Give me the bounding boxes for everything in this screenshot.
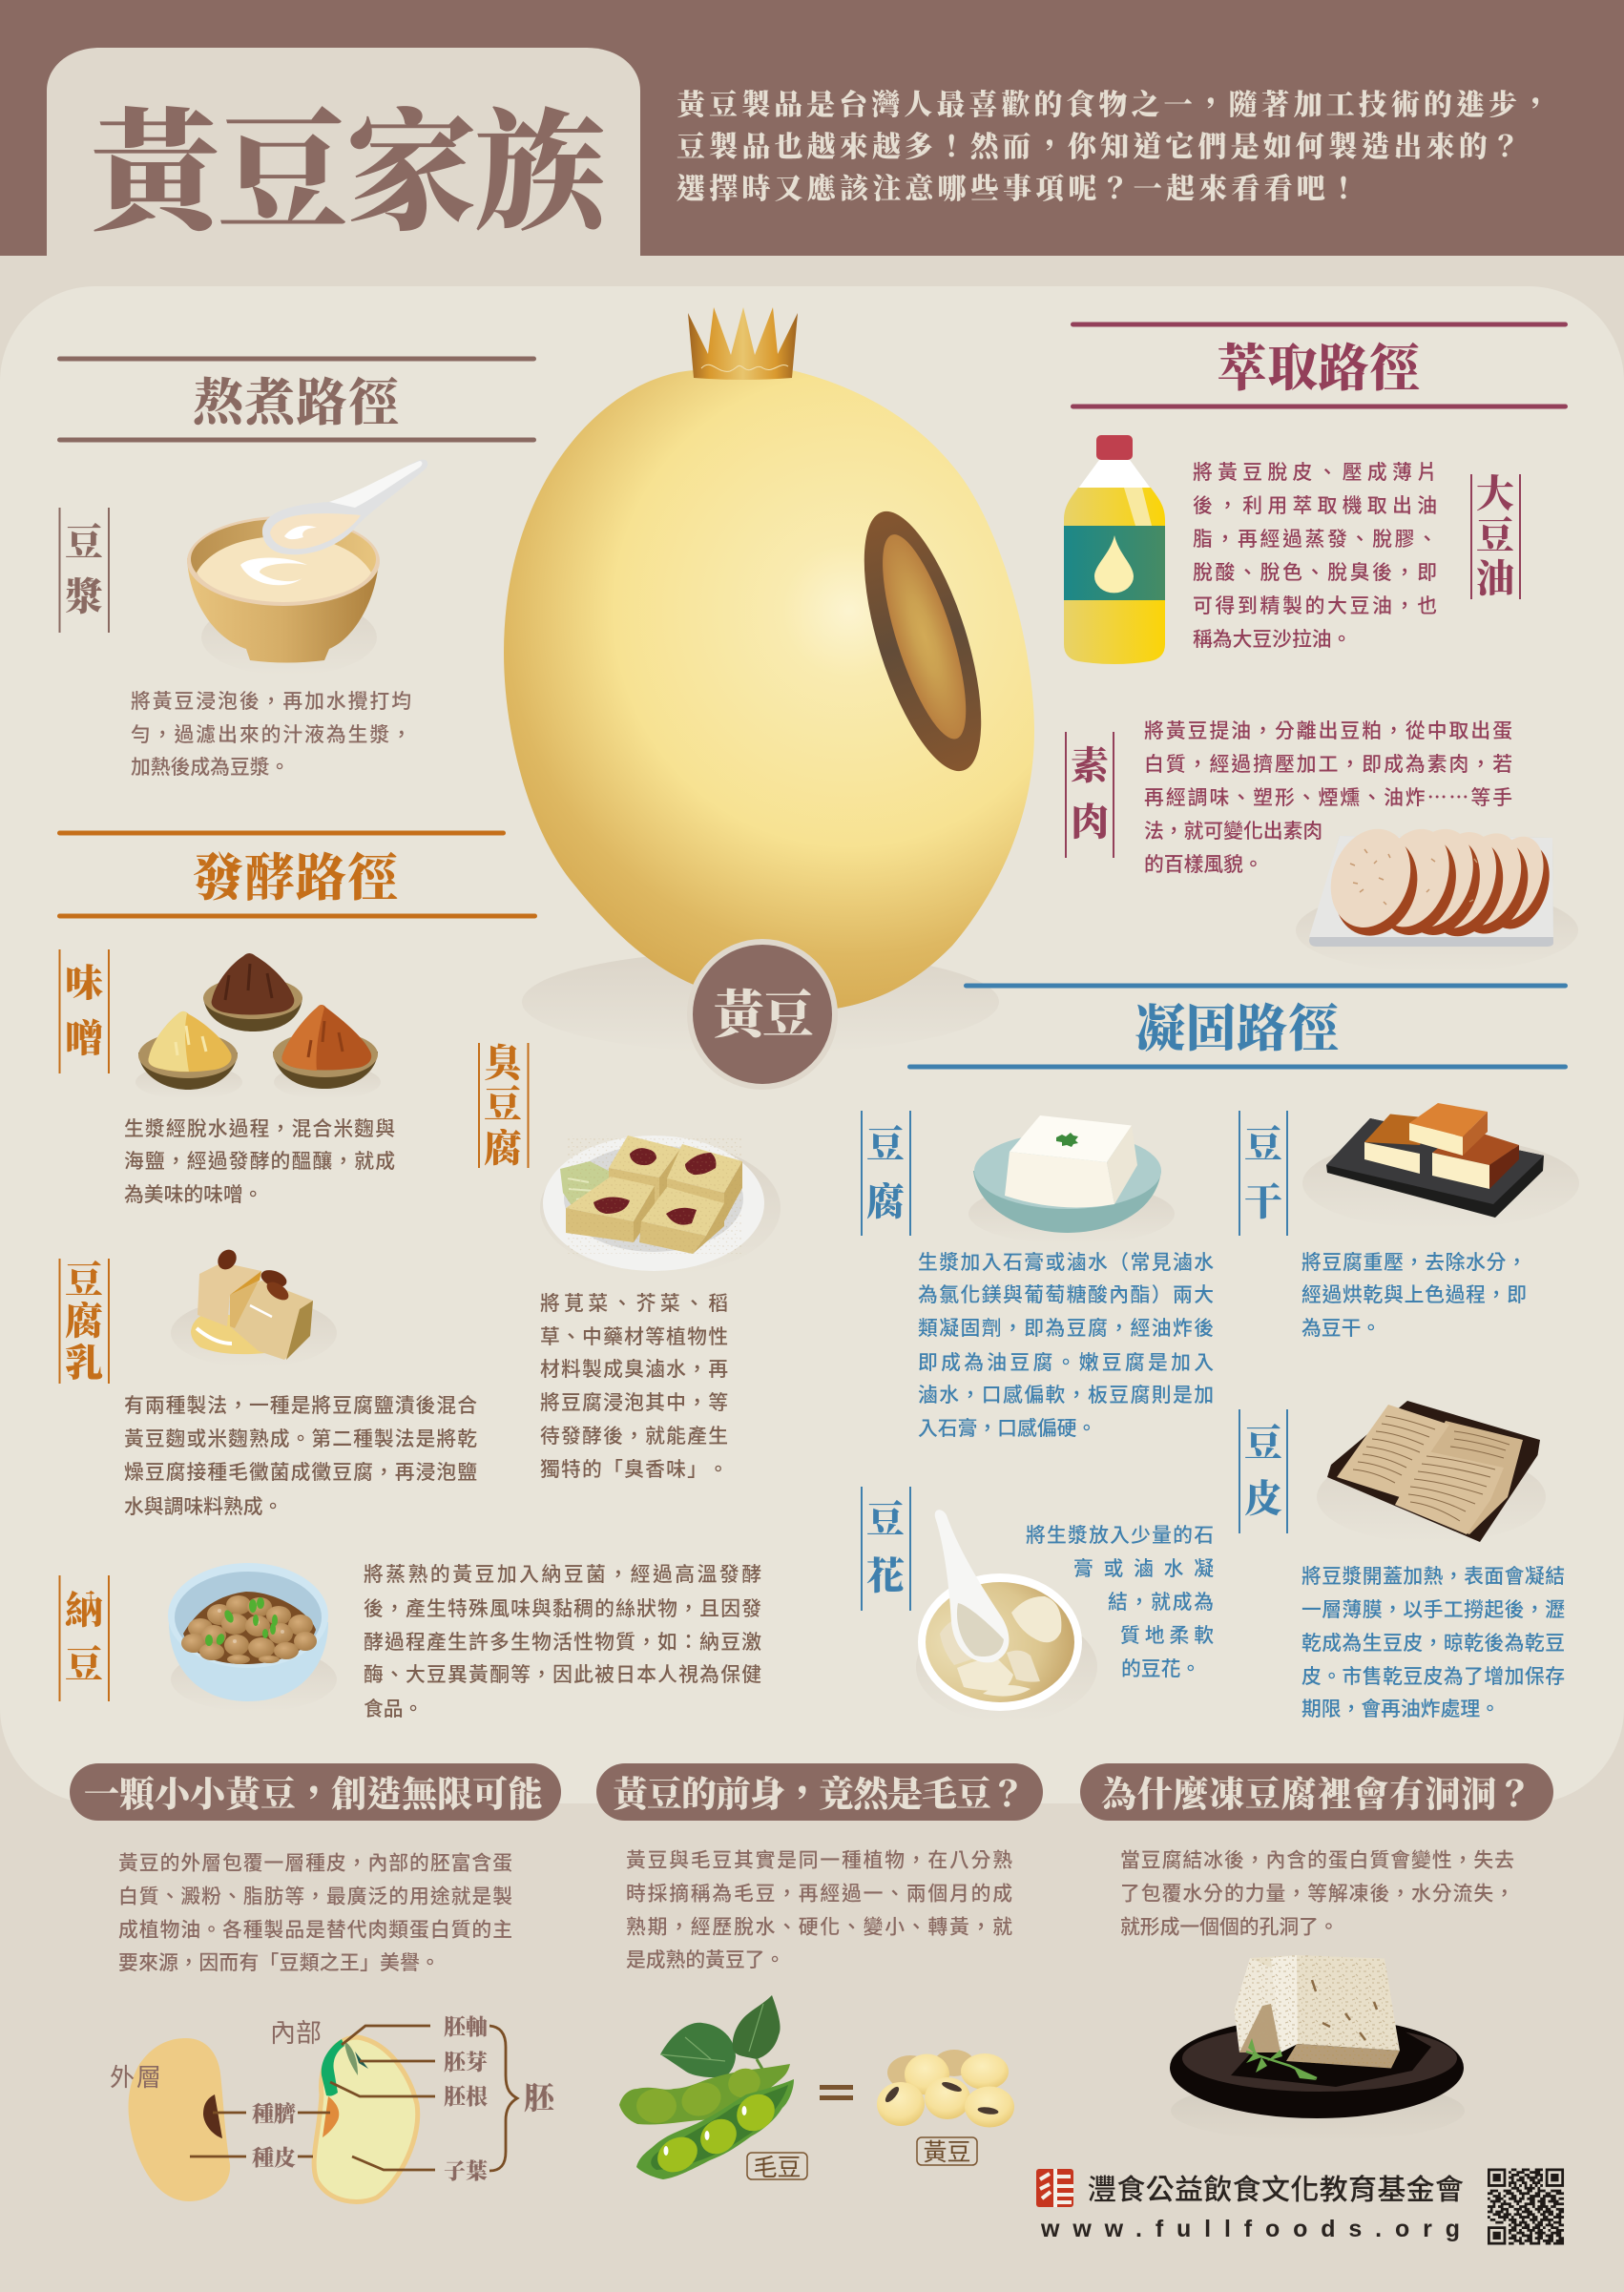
text 豆花: 結，就成為 xyxy=(1108,1592,1214,1614)
footer: foundation logo and name xyxy=(1036,2168,1564,2245)
text 納豆: 食品。 xyxy=(364,1698,423,1720)
text 豆皮: 乾成為生豆皮，晾乾後為乾豆 xyxy=(1301,1633,1565,1655)
label 臭豆腐 xyxy=(479,1042,529,1170)
label 素肉: 素 xyxy=(1071,744,1110,787)
label 納豆 xyxy=(59,1575,109,1701)
central soybean xyxy=(504,307,1034,1087)
text 豆漿: 將黃豆浸泡後，再加水攪打均 xyxy=(131,691,411,713)
tofu back right xyxy=(667,1144,742,1193)
label 豆花 xyxy=(862,1487,910,1611)
text 豆花: 質地柔軟 xyxy=(1120,1625,1214,1647)
label 大豆油 xyxy=(1471,472,1520,600)
bean body xyxy=(504,365,1034,1010)
labels: 外層 xyxy=(110,2063,161,2092)
text 納豆: 將蒸熟的黃豆加入納豆菌，經過高溫發酵 xyxy=(364,1564,761,1586)
label 納豆: 納 xyxy=(65,1589,103,1632)
text 豆花: 的豆花。 xyxy=(1121,1658,1200,1680)
panel: 黃豆的前身 xyxy=(596,1763,1043,2181)
text 豆漿: 加熱後成為豆漿。 xyxy=(131,757,289,779)
text 大豆油 xyxy=(1193,462,1437,651)
text 臭豆腐 xyxy=(540,1293,728,1481)
labels: 內部 xyxy=(270,2019,322,2048)
label 大豆油: 豆 xyxy=(1476,514,1514,557)
label 豆干: 豆 xyxy=(1244,1123,1282,1166)
text 豆腐乳 xyxy=(124,1395,477,1518)
text 素肉: 法，就可變化出素肉 xyxy=(1144,821,1322,843)
text 豆花: 膏或滷水凝 xyxy=(1073,1558,1214,1580)
text 豆干 xyxy=(1301,1252,1527,1340)
soybean badge xyxy=(690,942,835,1087)
logo mark xyxy=(1036,2169,1073,2207)
label 味噌 xyxy=(59,949,109,1073)
title tab xyxy=(47,48,640,256)
text 2: 黃豆與毛豆其實是同一種植物，在八分熟 xyxy=(626,1849,1012,1872)
text 臭豆腐: 待發酵後，就能產生 xyxy=(540,1426,728,1448)
text 豆皮 xyxy=(1301,1566,1565,1720)
label 味噌: 噌 xyxy=(65,1017,103,1060)
label 豆腐乳: 乳 xyxy=(65,1342,103,1385)
label 豆漿: 漿 xyxy=(65,575,103,618)
labels: 種皮 xyxy=(252,2146,296,2170)
text 素肉: 將黃豆提油，分離出豆粕，從中取出蛋 xyxy=(1144,720,1512,742)
text 味噌: 海鹽，經過發酵的醞釀，就成 xyxy=(124,1151,395,1173)
text 豆皮: 將豆漿開蓋加熱，表面會凝結 xyxy=(1301,1566,1565,1588)
text 豆腐乳: 燥豆腐接種毛黴菌成黴豆腐，再浸泡鹽 xyxy=(124,1462,477,1484)
title: 黃豆家族 xyxy=(89,101,616,247)
text 豆干: 為豆干。 xyxy=(1301,1318,1381,1340)
text 豆干: 將豆腐重壓，去除水分， xyxy=(1301,1252,1527,1274)
text 素肉: 的百樣風貌。 xyxy=(1144,854,1263,876)
heading 凝固路徑: 凝固路徑 xyxy=(1135,1001,1339,1057)
back pod xyxy=(619,2064,790,2125)
text 大豆油: 將黃豆脫皮、壓成薄片 xyxy=(1193,462,1437,484)
heading 發酵路徑 xyxy=(57,830,537,918)
foundation name: 灃食公益飲食文化教育基金會 xyxy=(1088,2175,1464,2206)
red miso xyxy=(273,1052,378,1089)
label 臭豆腐: 豆 xyxy=(484,1083,522,1126)
open pod xyxy=(636,2079,794,2179)
text 大豆油: 稱為大豆沙拉油。 xyxy=(1193,629,1351,651)
text 臭豆腐: 獨特的「臭香味」。 xyxy=(540,1459,728,1481)
pill heading 1 xyxy=(70,1763,561,1821)
text 豆皮: 期限，會再油炸處理。 xyxy=(1301,1698,1500,1720)
icon: frozen tofu on black plate xyxy=(1170,1955,1465,2141)
heading 發酵路徑: 發酵路徑 xyxy=(193,850,398,906)
labels xyxy=(110,2015,557,2183)
text 豆漿 xyxy=(131,691,411,779)
tofu front left xyxy=(566,1177,655,1221)
text 納豆: 後，產生特殊風味與黏稠的絲狀物，且因發 xyxy=(364,1598,761,1620)
label 臭豆腐: 腐 xyxy=(484,1127,522,1170)
diagram: soybean structure xyxy=(110,2015,557,2201)
label 納豆: 豆 xyxy=(65,1643,103,1686)
labels: 胚 xyxy=(524,2081,557,2115)
heading 熬煮路徑: 熬煮路徑 xyxy=(193,375,399,431)
label 毛豆: 毛豆 xyxy=(753,2155,802,2181)
pill heading 2: 黃豆的前身，竟然是毛豆？ xyxy=(613,1773,1026,1815)
bean hilum xyxy=(840,499,1006,783)
label 豆漿: 豆 xyxy=(65,521,103,564)
label 素肉: 肉 xyxy=(1071,801,1109,844)
yellow miso xyxy=(138,1052,238,1090)
text 豆腐: 即成為油豆腐。嫩豆腐是加入 xyxy=(918,1352,1214,1374)
heading 凝固路徑 xyxy=(907,983,1568,1069)
label 豆花: 豆 xyxy=(866,1498,905,1541)
hilum xyxy=(203,2094,222,2138)
text 1: 黃豆的外層包覆一層種皮，內部的胚富含蛋 xyxy=(118,1853,512,1874)
text 豆腐: 入石膏，口感偏硬。 xyxy=(918,1418,1096,1440)
text 臭豆腐: 將豆腐浸泡其中，等 xyxy=(540,1392,728,1414)
text 豆皮: 一層薄膜，以手工撈起後，瀝 xyxy=(1301,1599,1565,1621)
intro text: 黃豆製品是台灣人最喜歡的食物之一，隨著加工技術的進步， xyxy=(677,89,1550,121)
intro text: 豆製品也越來越多！然而，你知道它們是如何製造出來的？ xyxy=(677,131,1520,163)
labels: 種臍 xyxy=(252,2101,296,2126)
label 豆腐乳: 豆 xyxy=(65,1259,103,1302)
text 豆漿: 勻，過濾出來的汁液為生漿， xyxy=(131,724,411,746)
label 豆腐乳 xyxy=(59,1259,109,1385)
pill heading 3 xyxy=(1080,1763,1553,1821)
text 豆腐: 生漿加入石膏或滷水（常見滷水 xyxy=(918,1252,1214,1274)
text 1: 白質、澱粉、脂肪等，最廣泛的用途就是製 xyxy=(118,1886,512,1908)
label 豆漿 xyxy=(59,508,109,633)
icon: dried yuba on tray xyxy=(1317,1401,1546,1543)
panel: 凍豆腐 xyxy=(1080,1763,1553,2141)
text 素肉: 再經調味、塑形、煙燻、油炸……等手 xyxy=(1144,781,1512,810)
text 豆腐乳: 黃豆麴或米麴熟成。第二種製法是將乾 xyxy=(124,1428,477,1450)
text 1: 要來源，因而有「豆類之王」美譽。 xyxy=(118,1952,440,1974)
text 豆花 xyxy=(1026,1525,1214,1680)
label 豆腐: 腐 xyxy=(866,1180,905,1223)
text 納豆: 酵過程產生許多生物活性物質，如：納豆激 xyxy=(364,1632,761,1654)
herb xyxy=(1246,2038,1317,2080)
section: 熬煮路徑 xyxy=(57,357,536,779)
text 1: 成植物油。各種製品是替代肉類蛋白質的主 xyxy=(118,1920,512,1941)
text 味噌: 為美味的味噌。 xyxy=(124,1184,263,1206)
text 臭豆腐: 草、中藥材等植物性 xyxy=(540,1326,728,1348)
intro text: 選擇時又應該注意哪些事項呢？一起來看看吧！ xyxy=(677,173,1358,205)
label 豆皮: 豆 xyxy=(1244,1422,1282,1465)
text 味噌: 生漿經脫水過程，混合米麴與 xyxy=(124,1118,395,1140)
labels: 胚軸 xyxy=(444,2015,488,2039)
icon: edamame xyxy=(619,1995,794,2179)
icon: soybean oil bottle xyxy=(1064,435,1165,664)
equals sign xyxy=(820,2085,853,2100)
text 2: 時採摘稱為毛豆，再經過一、兩個月的成 xyxy=(626,1884,1012,1905)
crown xyxy=(688,307,798,380)
icon: soy milk bowl xyxy=(187,460,427,676)
text 臭豆腐: 材料製成臭滷水，再 xyxy=(540,1359,728,1381)
text 3: 了包覆水分的力量，等解凍後，水分流失， xyxy=(1120,1884,1514,1905)
text 3: 當豆腐結冰後，內含的蛋白質會變性，失去 xyxy=(1120,1849,1514,1872)
inner bean xyxy=(314,2037,418,2201)
tofu back left xyxy=(609,1136,680,1177)
heading 熬煮路徑 xyxy=(57,357,536,443)
labels: 胚芽 xyxy=(444,2051,488,2074)
tofu front right xyxy=(641,1187,724,1236)
section: 萃取路徑 xyxy=(1064,323,1578,972)
label 味噌: 味 xyxy=(65,962,103,1005)
leader lines xyxy=(190,2026,517,2171)
soybean badge: 黃豆 xyxy=(713,987,814,1044)
text 3 xyxy=(1120,1849,1514,1939)
brown miso xyxy=(203,997,302,1031)
icon: fermented tofu xyxy=(171,1246,337,1367)
text 豆腐: 滷水，口感偏軟，板豆腐則是加 xyxy=(918,1385,1214,1406)
label 豆腐 xyxy=(862,1111,910,1236)
text 臭豆腐: 將莧菜、芥菜、稻 xyxy=(540,1293,728,1315)
section: 凝固路徑 xyxy=(862,983,1579,1722)
icon: dried tofu on slate xyxy=(1302,1103,1579,1229)
text 素肉: 白質，經過擠壓加工，即成為素肉，若 xyxy=(1144,754,1512,776)
label 豆干 xyxy=(1239,1111,1287,1236)
text 大豆油: 可得到精製的大豆油，也 xyxy=(1193,595,1437,617)
text 納豆 xyxy=(364,1564,761,1720)
text 豆腐: 為氯化鎂與葡萄糖酸內酯）兩大 xyxy=(918,1284,1214,1306)
icon: vegetarian meat slices xyxy=(1296,818,1578,972)
bean ground shadow xyxy=(522,950,999,1053)
text 豆腐 xyxy=(918,1252,1214,1440)
icon: natto bowl xyxy=(168,1563,337,1712)
text 大豆油: 後，利用萃取機取出油 xyxy=(1193,495,1437,517)
intro text xyxy=(677,89,1550,205)
label 素肉 xyxy=(1066,732,1114,858)
text 豆皮: 皮。市售乾豆皮為了增加保存 xyxy=(1301,1666,1565,1688)
website: www.fullfoods.org xyxy=(1040,2216,1460,2242)
outer bean xyxy=(129,2038,230,2201)
label 大豆油: 油 xyxy=(1476,557,1514,600)
label 豆干: 干 xyxy=(1244,1180,1282,1223)
text 2: 是成熟的黃豆了。 xyxy=(626,1949,784,1971)
icon: stinky tofu plate xyxy=(540,1136,781,1275)
pill heading 3: 為什麼凍豆腐裡會有洞洞？ xyxy=(1101,1774,1532,1815)
QR code xyxy=(1488,2168,1564,2245)
panel: 一顆小小黃豆 xyxy=(70,1763,561,2201)
text 2 xyxy=(626,1849,1012,1971)
text 豆干: 經過烘乾與上色過程，即 xyxy=(1301,1284,1527,1306)
icon: three miso bowls xyxy=(135,953,381,1099)
label 豆腐乳: 腐 xyxy=(65,1300,103,1343)
icon: soybeans xyxy=(877,2050,1014,2128)
label 豆花: 花 xyxy=(866,1554,905,1597)
labels: 胚根 xyxy=(444,2085,488,2109)
text 豆腐乳: 有兩種製法，一種是將豆腐鹽漬後混合 xyxy=(124,1395,477,1417)
label 大豆油: 大 xyxy=(1476,472,1514,515)
heading 萃取路徑 xyxy=(1071,323,1568,408)
text 1 xyxy=(118,1853,512,1974)
text 豆腐乳: 水與調味料熟成。 xyxy=(124,1496,282,1518)
labels: 子葉 xyxy=(444,2159,488,2183)
text 素肉 xyxy=(1144,720,1512,876)
text 3: 就形成一個個的孔洞了。 xyxy=(1120,1916,1339,1939)
icon: douhua bowl with spoon xyxy=(916,1510,1097,1722)
text 大豆油: 脂，再經過蒸發、脫膠、 xyxy=(1193,529,1437,551)
text 大豆油: 脫酸、脫色、脫臭後，即 xyxy=(1193,562,1437,584)
text 納豆: 酶、大豆異黃酮等，因此被日本人視為保健 xyxy=(364,1664,761,1686)
pill heading 2 xyxy=(596,1763,1043,1821)
label 豆腐: 豆 xyxy=(866,1123,905,1166)
label 黃豆: 黃豆 xyxy=(923,2139,971,2166)
label 豆皮: 皮 xyxy=(1244,1477,1282,1520)
header band xyxy=(0,0,1624,256)
text 2: 熟期，經歷脫水、硬化、變小、轉黃，就 xyxy=(626,1916,1012,1939)
heading 萃取路徑: 萃取路徑 xyxy=(1217,341,1420,397)
label 臭豆腐: 臭 xyxy=(484,1042,522,1085)
label 豆皮 xyxy=(1239,1409,1287,1533)
pill heading 1: 一顆小小黃豆，創造無限可能 xyxy=(84,1775,543,1815)
text 味噌 xyxy=(124,1118,395,1206)
main panel xyxy=(0,286,1624,1803)
icon: tofu on plate xyxy=(968,1115,1175,1244)
section: 發酵路徑 xyxy=(57,830,781,1720)
text 豆花: 將生漿放入少量的石 xyxy=(1026,1525,1214,1547)
text 豆腐: 類凝固劑，即為豆腐，經油炸後 xyxy=(918,1318,1214,1340)
